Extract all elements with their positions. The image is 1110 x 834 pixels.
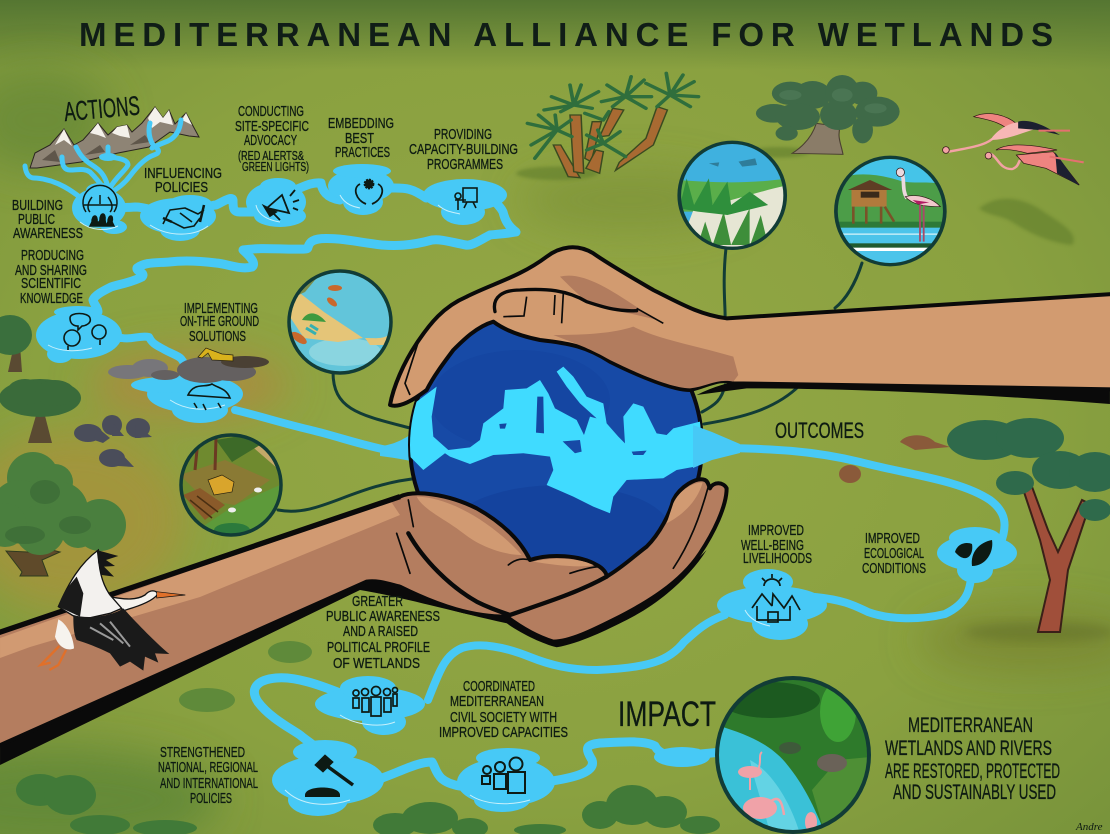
icon: hands and gear	[356, 180, 382, 204]
label: conducting site-specific advocacy: ADVOCACY	[244, 132, 297, 149]
label: producing and sharing scientific knowledge: KNOWLEDGE	[20, 290, 83, 307]
heading: actions: ACTIONS	[63, 91, 141, 127]
label: greater public awareness: AND A RAISED	[343, 623, 418, 640]
rivers and pools	[36, 164, 1017, 816]
pool: livelihoods	[717, 569, 827, 640]
icon: leaves	[955, 540, 992, 566]
label: coordinated civil society: COORDINATED	[463, 678, 535, 695]
label: implementing on-the-ground solutions: IMPLEMENTING	[184, 300, 258, 317]
label: influencing policies: INFLUENCING	[144, 165, 222, 182]
label: conducting site-specific advocacy: GREEN LIGHTS)	[242, 160, 309, 174]
label: greater public awareness: POLITICAL PROFILE	[327, 639, 430, 656]
rubble and excavator	[108, 348, 269, 383]
map: Mediterranean water	[410, 367, 703, 513]
icon: wetland landscape	[188, 384, 230, 410]
river: to restoration site	[115, 337, 392, 451]
shrubs along the bottom	[16, 641, 720, 834]
tree: left bottom	[0, 452, 126, 576]
pool: policies	[272, 740, 384, 816]
label: conducting site-specific advocacy: SITE-SPECIFIC	[235, 118, 309, 135]
pool: influencing policies	[140, 195, 216, 241]
tree: left middle	[0, 379, 81, 443]
photo circle: farm	[180, 434, 285, 540]
pool: scientific knowledge	[36, 306, 122, 363]
label: conducting site-specific advocacy: CONDUCTING	[238, 103, 304, 120]
label: providing capacity-building programmes: PROGRAMMES	[427, 156, 503, 173]
label: coordinated civil society: CIVIL SOCIETY WITH	[450, 709, 557, 726]
label: providing capacity-building programmes: CAPACITY-BUILDING	[409, 141, 518, 158]
icon: handshake	[163, 205, 204, 228]
label: coordinated civil society: MEDITERRANEAN	[450, 693, 544, 710]
river: actions path	[93, 183, 516, 312]
label: improved ecological conditions: IMPROVED	[865, 530, 920, 547]
icon: globe and people	[83, 185, 117, 226]
label: building public awareness: AWARENESS	[13, 225, 83, 242]
label: producing and sharing scientific knowledge: SCIENTIFIC	[21, 275, 81, 292]
river mouth: right of globe	[693, 425, 740, 468]
palm trees, olive tree, flamingos (scaled group)	[516, 73, 1084, 245]
impact statement: MEDITERRANEAN	[908, 714, 1033, 737]
globe	[408, 324, 704, 574]
heading: impact: IMPACT	[618, 695, 716, 734]
stork	[41, 550, 185, 671]
icon: sun and houses	[752, 574, 800, 622]
label: conducting site-specific advocacy: (RED ALERTS&	[238, 149, 304, 163]
label: influencing policies: POLICIES	[155, 179, 208, 196]
label: strengthened policies: POLICIES	[190, 790, 232, 807]
label: building public awareness: PUBLIC	[18, 211, 55, 228]
label: greater public awareness: OF WETLANDS	[333, 655, 420, 672]
icon: megaphone	[264, 190, 299, 220]
olive tree	[756, 75, 900, 154]
river: wide estuary to impact	[654, 747, 710, 767]
tree: left upper	[0, 315, 32, 372]
right acacia tree	[947, 418, 1110, 632]
label: greater public awareness: PUBLIC AWARENESS	[326, 608, 440, 625]
pool ripples	[48, 195, 770, 804]
label: improved well-being livelihoods: IMPROVED	[748, 522, 804, 539]
photo circle: seagrass	[677, 141, 789, 252]
label: producing and sharing scientific knowledge: PRODUCING	[21, 247, 84, 264]
palm trunks	[553, 107, 667, 178]
label: greater public awareness: GREATER	[352, 593, 403, 610]
heading: outcomes: OUTCOMES	[775, 418, 864, 443]
label: embedding best practices: BEST	[345, 130, 374, 147]
circle stems	[278, 248, 862, 511]
label: coordinated civil society: IMPROVED CAPACITIES	[439, 724, 568, 741]
pool: site-specific advocacy	[246, 178, 306, 227]
photo circle: flamingo and hut	[835, 157, 946, 267]
pool: on-the-ground solutions	[131, 375, 243, 423]
pool: embedding best practices	[328, 164, 394, 215]
label: implementing on-the-ground solutions: SOLUTIONS	[189, 328, 246, 345]
mountains	[30, 107, 199, 168]
icon: speech bubbles and heads	[64, 314, 106, 350]
shadows under palms and tree	[516, 147, 1074, 245]
animals: grey group	[74, 415, 152, 467]
label: implementing on-the-ground solutions: ON-THE GROUND	[180, 313, 259, 330]
flamingo: upper	[943, 114, 1070, 153]
photo circle: impact wetland	[715, 678, 871, 834]
tree shadow: right tree	[965, 622, 1110, 642]
icon: gavel	[305, 755, 353, 797]
photo circle: beach	[285, 268, 395, 378]
river: impact path	[254, 678, 722, 786]
palm fronds	[527, 73, 699, 158]
pool: capacity building	[423, 179, 507, 225]
animals: beavers	[839, 435, 950, 483]
pool: civil society	[457, 748, 555, 812]
river: outcomes path	[428, 448, 1005, 700]
signature: Andre	[1075, 821, 1103, 833]
label: strengthened policies: AND INTERNATIONAL	[160, 775, 258, 792]
photo circles: seagrass and flamingo	[677, 141, 946, 267]
icon: three people	[482, 758, 525, 793]
label: embedding best practices: EMBEDDING	[328, 115, 394, 132]
river: mountain tributaries	[25, 120, 181, 198]
label: providing capacity-building programmes: PROVIDING	[434, 126, 492, 143]
label: improved ecological conditions: CONDITIONS	[862, 560, 926, 577]
label: improved well-being livelihoods: LIVELIHOODS	[743, 550, 812, 567]
label: building public awareness: BUILDING	[12, 197, 63, 214]
flamingo: lower	[985, 145, 1084, 186]
label: embedding best practices: PRACTICES	[335, 144, 390, 161]
pool: greater public awareness	[315, 676, 425, 735]
label: improved ecological conditions: ECOLOGICAL	[864, 545, 924, 562]
pool: building public awareness	[72, 183, 127, 234]
label: strengthened policies: STRENGTHENED	[160, 744, 245, 761]
label: improved well-being livelihoods: WELL-BEING	[741, 537, 804, 554]
hand: upper, with arm	[390, 247, 1110, 406]
pool: ecological conditions	[937, 527, 1017, 583]
hand: lower, with arm	[0, 479, 727, 765]
label: strengthened policies: NATIONAL, REGIONAL	[158, 759, 258, 776]
icon: presenter and board	[455, 188, 477, 210]
label: producing and sharing scientific knowledge: AND SHARING	[15, 262, 87, 279]
river mouth: left of globe	[380, 432, 447, 465]
title: MEDITERRANEAN ALLIANCE FOR WETLANDS	[79, 16, 1053, 53]
icon: group of people	[353, 686, 398, 716]
